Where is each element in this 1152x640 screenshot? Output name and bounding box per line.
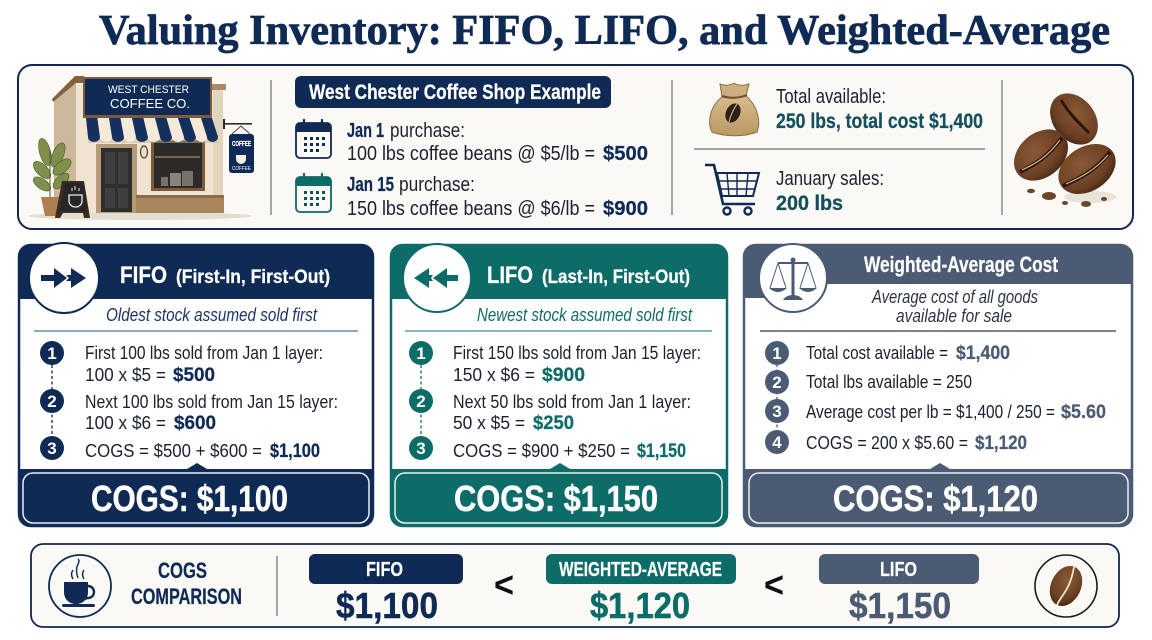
LIFO value: $1,150: [849, 585, 951, 626]
step 3: 3: [47, 439, 57, 458]
FIFO result: [18, 463, 374, 527]
icon: shopping cart: [705, 165, 759, 214]
door: [96, 144, 137, 213]
step 1: 1: [416, 344, 426, 363]
step 2: $600: [174, 413, 216, 434]
step 1: 1: [47, 344, 57, 363]
step 2: [40, 389, 338, 434]
FIFO value: $1,100: [336, 585, 438, 626]
panel: FIFO: [18, 243, 374, 527]
step 3: 3: [416, 439, 426, 458]
heading: COGS comparison: COGS: [158, 558, 207, 583]
icon: coffee bean: [1035, 555, 1097, 617]
text block: Jan 1 purchase: $500: [603, 143, 648, 165]
step 3: [409, 436, 686, 462]
less-than sign: <: [764, 564, 784, 605]
icon: coffee shop storefront: [28, 76, 254, 220]
step 4: COGS = 200 x $5.60 =: [806, 433, 968, 453]
text block: Jan 1 purchase: 100 lbs coffee beans @ $5/lb =: [347, 143, 595, 165]
step 1: $1,400: [956, 343, 1010, 364]
text block: total available: Total available:: [776, 86, 886, 108]
plant: [30, 137, 74, 197]
text block: total available: 250 lbs, total cost $1,400: [776, 110, 983, 133]
subtitle: Oldest stock assumed sold first: [106, 305, 318, 325]
hanging sign: COFFEE: [232, 141, 251, 148]
step 1: 1: [772, 344, 782, 363]
text block: January sales: 200 lbs: [776, 192, 843, 215]
awning: [86, 118, 218, 143]
step 2: Next 100 lbs sold from Jan 15 layer:: [85, 392, 338, 412]
LIFO header: [390, 244, 728, 299]
step 3: $1,100: [270, 441, 320, 462]
step 3: Average cost per lb = $1,400 / 250 =: [806, 402, 1055, 422]
heading: COGS comparison: COMPARISON: [131, 584, 242, 609]
text block: Jan 15 purchase: [347, 174, 648, 220]
LIFO value: LIFO: [880, 559, 917, 581]
icon: calendar Jan 15: [296, 174, 331, 212]
icon: forward arrows: [29, 243, 99, 313]
panel: example overview: [18, 65, 1133, 229]
step 1: $500: [173, 365, 215, 386]
plant pot: [41, 197, 62, 216]
text block: total available: [776, 86, 983, 133]
weighted-average result: [743, 463, 1133, 527]
subtitle: Average cost of all goods: [871, 287, 1038, 307]
chalkboard sign: [55, 181, 90, 218]
text block: Jan 15 purchase: Jan 15: [347, 174, 394, 196]
icon: calendar Jan 1: [296, 120, 331, 158]
step 3: COGS = $500 + $600 =: [85, 441, 262, 461]
step 3: [40, 436, 320, 462]
LIFO result: [390, 463, 728, 527]
LIFO result: COGS: $1,150: [454, 478, 658, 519]
text block: Jan 1 purchase: [347, 120, 648, 165]
step 2: 2: [416, 392, 426, 411]
title: Valuing Inventory: FIFO, LIFO, and Weighted-Average: [99, 8, 1110, 54]
less-than sign: <: [494, 564, 514, 605]
step 1: $900: [542, 365, 585, 386]
step 1: [765, 341, 1010, 365]
step 2: 2: [772, 373, 782, 392]
heading pill: example: [295, 76, 611, 108]
heading: COGS comparison: [131, 558, 242, 609]
weighted-average header: [743, 244, 1133, 298]
step 2: $250: [533, 413, 574, 434]
icon: coffee cup: [49, 555, 111, 617]
text block: Jan 15 purchase: 150 lbs coffee beans @ $6/lb =: [347, 198, 595, 220]
icon: coffee shop storefront: COFFEE CO.: [110, 96, 190, 111]
icon: backward arrows: [403, 244, 471, 312]
step 2: 50 x $5 =: [453, 413, 525, 433]
panel: Weighted-Average Cost: [743, 244, 1133, 527]
step 4: $1,120: [975, 433, 1027, 454]
FIFO header: (First-In, First-Out): [176, 267, 330, 288]
step 2: 100 x $6 =: [85, 413, 166, 433]
LIFO value: [819, 554, 979, 626]
text block: Jan 1 purchase: Jan 1: [347, 120, 384, 142]
window: [151, 140, 205, 191]
step 1: Total cost available =: [806, 343, 948, 363]
step 4: 4: [772, 433, 782, 452]
step 2: Next 50 lbs sold from Jan 1 layer:: [453, 392, 691, 412]
text block: January sales: January sales:: [776, 168, 884, 190]
step 4: [765, 430, 1027, 454]
text block: Jan 1 purchase: purchase:: [390, 120, 465, 142]
step 3: 3: [772, 402, 782, 421]
text block: Jan 15 purchase: $900: [603, 198, 648, 220]
weighted-average value: [546, 554, 736, 626]
step 2: 2: [47, 392, 57, 411]
hanging sign: COFFEE: [232, 166, 251, 172]
FIFO header: FIFO: [120, 262, 167, 289]
panel: LIFO: [390, 244, 728, 527]
step 1: [40, 341, 323, 386]
step 1: 150 x $6 =: [453, 365, 535, 385]
panel: COGS comparison: [31, 544, 1119, 627]
subtitle: Newest stock assumed sold first: [477, 305, 693, 325]
step 2: [765, 370, 972, 394]
icon: coffee beans: [1004, 84, 1125, 207]
step 1: 100 x $5 =: [85, 365, 166, 385]
weighted-average header: Weighted-Average Cost: [864, 252, 1059, 277]
icon: balance scales: [759, 244, 827, 312]
subtitle: available for sale: [896, 306, 1012, 326]
step 1: [409, 341, 701, 386]
FIFO value: FIFO: [366, 559, 403, 581]
subtitle: [871, 287, 1038, 326]
LIFO header: (Last-In, First-Out): [542, 267, 690, 288]
FIFO header: [18, 244, 374, 299]
weighted-average value: WEIGHTED-AVERAGE: [559, 559, 722, 581]
icon: coffee sack: [710, 83, 759, 136]
weighted-average result: COGS: $1,120: [833, 478, 1038, 519]
text block: January sales: [776, 168, 884, 215]
weighted-average value: $1,120: [590, 585, 690, 626]
FIFO result: COGS: $1,100: [91, 478, 288, 519]
icon: coffee shop storefront: WEST CHESTER: [108, 84, 189, 96]
LIFO header: LIFO: [487, 262, 533, 289]
step 2: [409, 389, 691, 434]
step 2: Total lbs available = 250: [806, 372, 972, 392]
step 1: First 100 lbs sold from Jan 1 layer:: [85, 343, 323, 363]
FIFO value: [309, 554, 463, 626]
heading pill: example: West Chester Coffee Shop Example: [309, 81, 601, 104]
step 1: First 150 lbs sold from Jan 15 layer:: [453, 343, 701, 363]
hanging sign: [223, 119, 254, 173]
text block: Jan 15 purchase: purchase:: [399, 174, 475, 196]
step 3: $1,150: [637, 441, 686, 462]
step 3: $5.60: [1061, 402, 1106, 423]
step 3: COGS = $900 + $250 =: [453, 441, 630, 461]
